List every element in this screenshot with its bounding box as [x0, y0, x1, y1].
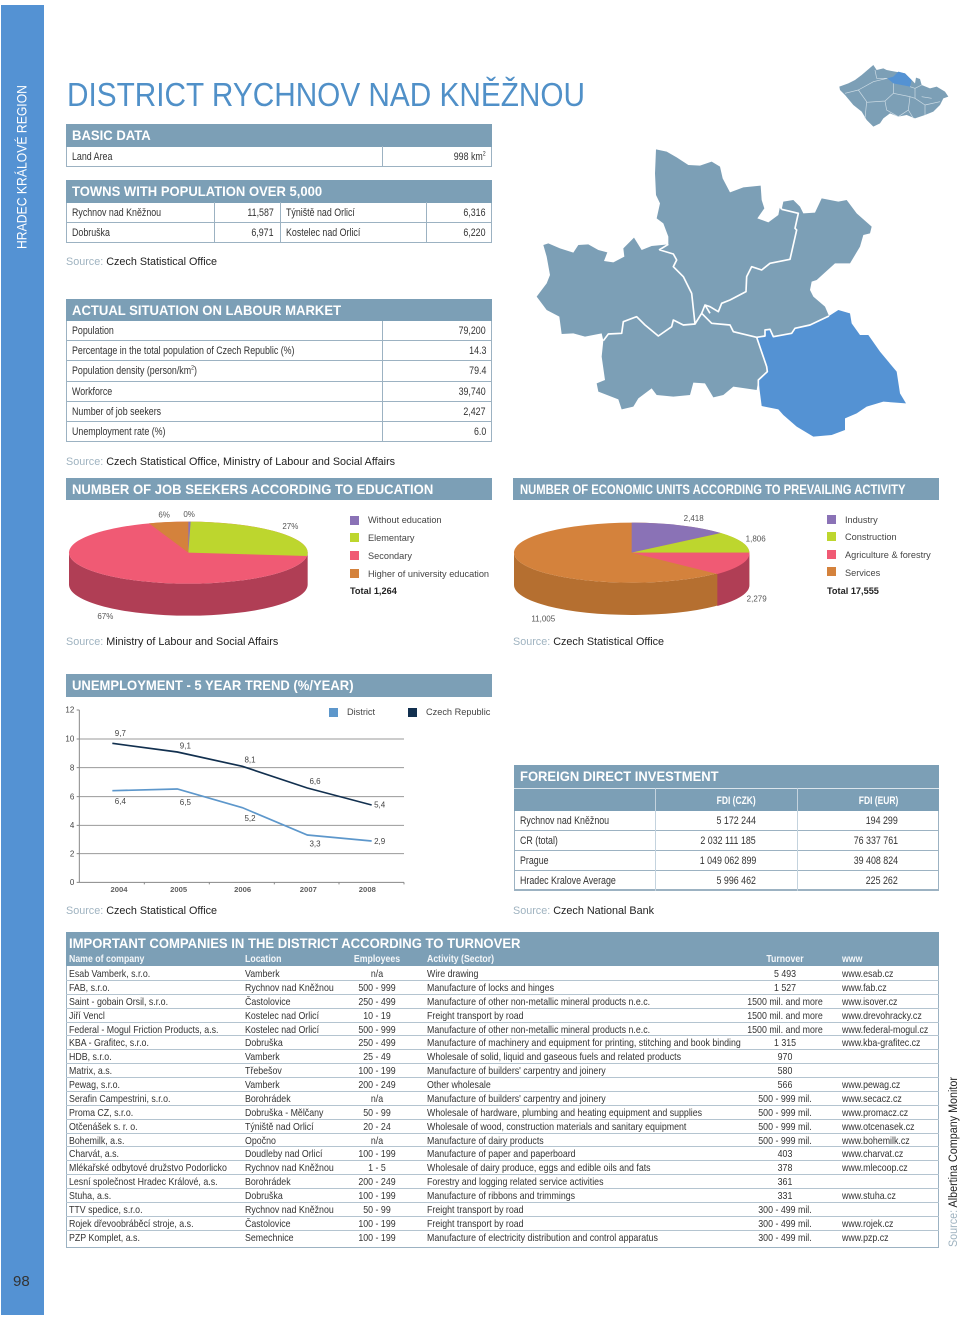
row: population: Population [72, 325, 114, 337]
row: Esab [66, 967, 939, 981]
row: Otčenášek: Wholesale of wood, construction materials and sanitary equipment [427, 1121, 686, 1133]
row: Lesní společnost: 361 [778, 1176, 792, 1188]
row: Esab: Wire drawing [427, 968, 478, 980]
row: Bohemilk [66, 1134, 939, 1147]
row: TTV: 50 - 99 [363, 1204, 391, 1216]
axis labels: 8 [70, 763, 75, 772]
row: percentage [66, 341, 492, 361]
row: Stuha: Dobruška [245, 1190, 283, 1202]
source: companies (rotated): Source: Albertina Company Monitor [948, 1077, 960, 1247]
row: column headers: Location [245, 954, 281, 964]
axis labels [65, 706, 75, 887]
row: unemployment rate: Unemployment rate (%) [72, 426, 166, 438]
row: Mlékařské družstvo [66, 1161, 939, 1175]
row: Proma: 50 - 99 [363, 1107, 391, 1119]
pie chart: economic units: 11,005 [531, 615, 556, 624]
row: Federal-Mogul: 1500 mil. and more [747, 1024, 823, 1036]
row: Serafin: Manufacture of builders' carpentry and joinery [427, 1093, 606, 1105]
row: Rojek: www.rojek.cz [842, 1218, 893, 1230]
row: Pewag: Pewag, s.r.o. [69, 1079, 120, 1091]
row: towns 1: Týniště nad Orlicí [286, 206, 355, 218]
pie chart: job seekers by education: 6% [158, 511, 170, 520]
row: towns 2: 6,220 [464, 227, 486, 239]
page number: 98 [13, 1273, 30, 1290]
legend: economic units: Agriculture & forestry [845, 550, 931, 560]
row: Venci [66, 1009, 939, 1022]
row: Rojek: Častolovice [245, 1218, 291, 1230]
row: Matrix: Třebešov [245, 1065, 282, 1077]
row: Stuha [66, 1189, 939, 1203]
row: Esab: 5 493 [774, 968, 796, 980]
row: Saint-Gobain [66, 995, 939, 1009]
heading: economic units: NUMBER OF ECONOMIC UNITS ACCORDING TO PREVAILING ACTIVITY [520, 482, 905, 496]
map: highlighted district Rychnov nad Kněžnou [757, 310, 906, 437]
legend: economic units [827, 514, 931, 596]
row: workforce: Workforce [72, 386, 112, 398]
row: Saint-Gobain: Manufacture of other non-metallic mineral products n.e.c. [427, 996, 650, 1008]
row: Serafin: Borohrádek [245, 1093, 291, 1105]
heading: unemployment trend [66, 674, 492, 696]
row: Federal-Mogul: www.federal-mogul.cz [842, 1024, 928, 1036]
row: Venci: www.drevohracky.cz [842, 1010, 922, 1022]
row: towns 1 [66, 202, 492, 223]
legend: job seekers by education: Without education [368, 515, 442, 525]
row: towns 2: Dobruška [72, 227, 110, 239]
row: towns 1: 6,316 [464, 206, 486, 218]
row: Bohemilk: Bohemilk, a.s. [69, 1135, 124, 1147]
row: PZP: Manufacture of electricity distribution and control apparatus [427, 1232, 658, 1244]
source: labour market: Source: Czech Statistical Office, Ministry of Labour and Social Affairs [66, 456, 395, 468]
row: column headers: www [842, 954, 862, 964]
row: Hradec Kralove average [514, 871, 939, 890]
row: Venci: Kostelec nad Orlicí [245, 1010, 319, 1022]
row: Hradec Kralove average: 225 262 [866, 875, 898, 887]
row: KBA: 250 - 499 [358, 1037, 396, 1049]
legend: economic units: Services [845, 568, 880, 578]
data labels: 9,1 [180, 741, 191, 750]
row: Matrix: Matrix, a.s. [69, 1065, 112, 1077]
row: Charvát: Charvát, a.s. [69, 1148, 119, 1160]
row: TTV: Freight transport by road [427, 1204, 524, 1216]
row: Serafin: n/a [371, 1093, 383, 1105]
row: Otčenášek: Týniště nad Orlicí [245, 1121, 314, 1133]
row: Saint-Gobain: Častolovice [245, 996, 291, 1008]
row: FAB: Rychnov nad Kněžnou [245, 982, 334, 994]
row: unemployment rate [66, 422, 492, 442]
row: Pewag: www.pewag.cz [842, 1079, 900, 1091]
series: District [112, 789, 372, 841]
row: FDI column headers: FDI (EUR) [858, 794, 898, 806]
row: Lesní společnost [66, 1175, 939, 1189]
legend: unemployment trend [329, 707, 490, 717]
sidebar: region band [1, 5, 44, 1315]
row: Otčenášek: 20 - 24 [363, 1121, 391, 1133]
pie chart: job seekers by education [68, 510, 308, 621]
row: Pewag [66, 1078, 939, 1092]
row: Stuha: www.stuha.cz [842, 1190, 896, 1202]
row: Otčenášek [66, 1120, 939, 1134]
panel: important companies [66, 932, 939, 1248]
data labels: 6,6 [309, 777, 321, 786]
heading: companies: IMPORTANT COMPANIES IN THE DISTRICT ACCORDING TO TURNOVER [69, 936, 520, 951]
legend: job seekers by education: Elementary [368, 533, 414, 543]
row: FDI column headers [514, 788, 939, 810]
row: workforce: 39,740 [459, 386, 486, 398]
row: KBA: 1 315 [774, 1037, 796, 1049]
source: job seekers: Source: Ministry of Labour and Social Affairs [66, 636, 278, 648]
data labels: 3,3 [309, 839, 321, 848]
series: Czech Republic [112, 743, 372, 805]
row: Esab: Esab Vamberk, s.r.o. [69, 968, 150, 980]
row: Bohemilk: n/a [371, 1135, 383, 1147]
row: KBA: Manufacture of machinery and equipment for printing, stitching and book binding [427, 1037, 741, 1049]
pie chart: job seekers by education: 27% [282, 522, 298, 531]
row: Saint-Gobain: Saint - gobain Orsil, s.r.o. [69, 996, 168, 1008]
row: Esab: www.esab.cz [842, 968, 893, 980]
row: Hradec Kralove average: Hradec Kralove Average [520, 875, 616, 887]
row: Bohemilk: www.bohemilk.cz [842, 1135, 910, 1147]
row: Lesní společnost: Forestry and logging related service activities [427, 1176, 603, 1188]
row: HDB: 970 [778, 1051, 792, 1063]
heading: job seekers by education: NUMBER OF JOB SEEKERS ACCORDING TO EDUCATION [72, 482, 433, 496]
row: Venci: Jiří Vencl [69, 1010, 105, 1022]
row: Charvát: 100 - 199 [358, 1148, 396, 1160]
legend: job seekers by education: Secondary [368, 550, 412, 560]
row: HDB [66, 1050, 939, 1064]
row: column headers [69, 954, 862, 964]
legend: job seekers by education: Higher of university education [368, 568, 489, 578]
row: land area [66, 146, 492, 167]
row: density [66, 361, 492, 382]
row: PZP [69, 1232, 889, 1244]
row: KBA: www.kba-grafitec.cz [842, 1037, 920, 1049]
year labels: 2006 [234, 885, 251, 894]
heading: unemployment trend: UNEMPLOYMENT - 5 YEAR TREND (%/YEAR) [72, 678, 354, 693]
heading: labour market: ACTUAL SITUATION ON LABOUR MARKET [72, 302, 341, 318]
data labels: 5,4 [374, 801, 386, 810]
row: Federal-Mogul [66, 1023, 939, 1036]
row: Proma: 500 - 999 mil. [758, 1107, 812, 1119]
row: PZP: 300 - 499 mil. [758, 1232, 812, 1244]
data labels: 5,2 [244, 814, 256, 823]
row: TTV: 300 - 499 mil. [758, 1204, 812, 1216]
row: unemployment rate: 6.0 [474, 426, 486, 438]
row: Stuha: 100 - 199 [358, 1190, 396, 1202]
row: job seekers: 2,427 [464, 406, 486, 418]
row: FAB: 500 - 999 [358, 982, 396, 994]
row: Mlékařské družstvo: 1 - 5 [368, 1162, 386, 1174]
row: workforce [66, 382, 492, 402]
row: TTV: TTV spedice, s.r.o. [69, 1204, 143, 1216]
row: Saint-Gobain: www.isover.cz [842, 996, 897, 1008]
row: Lesní společnost: Borohrádek [245, 1176, 291, 1188]
row: CR total: 76 337 761 [854, 835, 898, 847]
title: DISTRICT RYCHNOV NAD KNĚŽNOU [67, 76, 585, 113]
row: FAB: Manufacture of locks and hinges [427, 982, 554, 994]
data labels: 2,9 [374, 837, 386, 846]
row: Venci: Freight transport by road [427, 1010, 524, 1022]
row: Saint-Gobain: 1500 mil. and more [747, 996, 823, 1008]
row: towns 1: Rychnov nad Kněžnou [72, 206, 161, 218]
row: FDI column headers: FDI (CZK) [717, 794, 756, 806]
year labels: 2005 [170, 885, 188, 894]
row: KBA: KBA - Grafitec, s.r.o. [69, 1037, 149, 1049]
map: east district [710, 198, 872, 337]
row: job seekers: Number of job seekers [72, 406, 161, 418]
sidebar label: region name: HRADEC KRÁLOVÉ REGION [14, 85, 30, 249]
map: west district [537, 238, 695, 341]
row: Lesní společnost: 200 - 249 [358, 1176, 396, 1188]
row: Rychnov: 5 172 244 [717, 814, 756, 826]
row: Bohemilk: 500 - 999 mil. [758, 1135, 812, 1147]
row: PZP: Semechnice [245, 1232, 294, 1244]
row: Serafin: Serafin Campestrini, s.r.o. [69, 1093, 170, 1105]
axis labels: 10 [65, 735, 75, 744]
heading: companies [66, 932, 939, 966]
legend: job seekers by education [350, 515, 489, 596]
row: Serafin: 500 - 999 mil. [758, 1093, 812, 1105]
pie chart: job seekers by education: 0% [183, 510, 195, 519]
data labels [115, 729, 386, 848]
source: unemployment: Source: Czech Statistical Office [66, 905, 217, 917]
row: Charvát: www.charvat.cz [842, 1148, 903, 1160]
row: job seekers [66, 402, 492, 422]
row: Hradec Kralove average: 5 996 462 [717, 875, 756, 887]
row: FAB: FAB, s.r.o. [69, 982, 110, 994]
icon: Czech Republic locator map [839, 65, 948, 127]
row: Charvát: Manufacture of paper and paperboard [427, 1148, 576, 1160]
legend: unemployment trend: Czech Republic [426, 707, 490, 717]
source: economic units: Source: Czech Statistical Office [513, 636, 664, 648]
year labels: 2008 [359, 885, 377, 894]
row: Rojek: Rojek dřevoobráběcí stroje, a.s. [69, 1218, 194, 1230]
row: Federal-Mogul: Federal - Mogul Friction Products, a.s. [69, 1024, 219, 1036]
row: Pewag: 200 - 249 [358, 1079, 396, 1091]
panel: basic data [66, 124, 492, 167]
row: HDB: Vamberk [245, 1051, 280, 1063]
legend: economic units: Construction [845, 532, 897, 542]
row: column headers: Name of company [69, 954, 144, 964]
row: Otčenášek: Otčenášek s. r. o. [69, 1121, 138, 1133]
row: Pewag: Other wholesale [427, 1079, 491, 1091]
row: Otčenášek: 500 - 999 mil. [758, 1121, 812, 1133]
row: HDB: 25 - 49 [363, 1051, 391, 1063]
row: Pewag: Vamberk [245, 1079, 280, 1091]
axis labels: 0 [70, 878, 75, 887]
data labels: 6,5 [180, 798, 191, 807]
heading: labour market [66, 298, 492, 321]
row: FAB: 1 527 [774, 982, 796, 994]
row: Pewag: 566 [778, 1079, 792, 1091]
row: Venci: 10 - 19 [363, 1010, 391, 1022]
source: FDI: Source: Czech National Bank [513, 905, 654, 917]
row: density: 79.4 [469, 365, 486, 377]
row: Prague: Prague [520, 855, 549, 867]
row: CR total [514, 831, 939, 851]
heading: basic data: BASIC DATA [72, 128, 151, 143]
row: Bohemilk: Manufacture of dairy products [427, 1135, 544, 1147]
row: Rychnov: 194 299 [866, 814, 898, 826]
row: Mlékařské družstvo: 378 [778, 1162, 792, 1174]
data labels: 8,1 [244, 756, 256, 765]
row: column headers: Turnover [766, 954, 804, 964]
heading: job seekers by education [66, 478, 492, 500]
legend: economic units: Industry [845, 514, 878, 524]
heading: economic units [513, 478, 939, 500]
row: Proma: Dobruška - Mělčany [245, 1107, 323, 1119]
row: Federal-Mogul: Manufacture of other non-metallic mineral products n.e.c. [427, 1024, 650, 1036]
axis labels: 4 [70, 821, 75, 830]
pie chart: job seekers by education: 67% [97, 612, 113, 621]
row: Rychnov [514, 810, 939, 831]
data labels: 6,4 [115, 797, 126, 806]
year labels [110, 885, 377, 894]
row: PZP: www.pzp.cz [842, 1232, 889, 1244]
heading: towns [66, 180, 492, 202]
row: Matrix: Manufacture of builders' carpentry and joinery [427, 1065, 606, 1077]
row: Proma: Proma CZ, s.r.o. [69, 1107, 133, 1119]
row: Mlékařské družstvo: Rychnov nad Kněžnou [245, 1162, 334, 1174]
row: FAB: www.fab.cz [842, 982, 887, 994]
row: Matrix: 580 [778, 1065, 792, 1077]
row: KBA [66, 1036, 939, 1050]
panel: towns with population over 5,000 [66, 180, 492, 243]
row: towns 1: 11,587 [248, 206, 274, 218]
row: Rojek [66, 1217, 939, 1231]
row: Rychnov: Rychnov nad Kněžnou [520, 814, 609, 826]
row: Mlékařské družstvo: Mlékařské odbytové družstvo Podorlicko [69, 1162, 227, 1174]
row: Matrix: 100 - 199 [358, 1065, 396, 1077]
row: Prague: 39 408 824 [854, 855, 898, 867]
source: towns: Source: Czech Statistical Office [66, 256, 217, 268]
heading: FDI [514, 765, 939, 788]
panel: labour market [66, 298, 492, 442]
heading: towns: TOWNS WITH POPULATION OVER 5,000 [72, 184, 322, 199]
row: Matrix [66, 1064, 939, 1078]
row: column headers: Employees [354, 954, 400, 964]
row: towns 2: Kostelec nad Orlicí [286, 227, 360, 239]
row: Venci: 1500 mil. and more [747, 1010, 823, 1022]
row: percentage: 14.3 [469, 345, 486, 357]
row: Serafin [66, 1092, 939, 1106]
row: Esab: Vamberk [245, 968, 280, 980]
row: percentage: Percentage in the total population of Czech Republic (%) [72, 345, 294, 357]
line chart: unemployment trend [65, 706, 404, 894]
legend: job seekers by education: Total 1,264 [350, 586, 397, 596]
row: towns 2: 6,971 [252, 227, 274, 239]
year labels: 2004 [110, 885, 128, 894]
row: population: 79,200 [459, 325, 486, 337]
pie chart: economic units: 2,418 [684, 514, 704, 523]
row: FAB [66, 981, 939, 995]
row: Otčenášek: www.otcenasek.cz [842, 1121, 915, 1133]
legend: economic units: Total 17,555 [827, 586, 879, 596]
heading: FDI: FOREIGN DIRECT INVESTMENT [520, 769, 719, 784]
row: PZP: PZP Komplet, a.s. [69, 1232, 140, 1244]
map: Hradec Králové region with districts [536, 149, 906, 437]
row: Stuha: Stuha, a.s. [69, 1190, 111, 1202]
row: HDB: HDB, s.r.o. [69, 1051, 112, 1063]
axis labels: 6 [70, 792, 75, 801]
row: TTV [66, 1203, 939, 1217]
row: HDB: Wholesale of solid, liquid and gaseous fuels and related products [427, 1051, 681, 1063]
row: PZP: 100 - 199 [358, 1232, 396, 1244]
row: Charvát: Doudleby nad Orlicí [245, 1148, 322, 1160]
row: population [66, 321, 492, 341]
row: KBA: Dobruška [245, 1037, 283, 1049]
row: TTV: Rychnov nad Kněžnou [245, 1204, 334, 1216]
row: land area: 998 km2 [454, 150, 486, 162]
row: Charvát: 403 [778, 1148, 792, 1160]
row: Federal-Mogul: 500 - 999 [358, 1024, 396, 1036]
row: Bohemilk: Opočno [245, 1135, 276, 1147]
row: Rojek: 300 - 499 mil. [758, 1218, 812, 1230]
row: Charvát [66, 1147, 939, 1161]
heading: basic data [66, 124, 492, 146]
row: Prague: 1 049 062 899 [699, 855, 756, 867]
row: Mlékařské družstvo: www.mlecoop.cz [842, 1162, 908, 1174]
legend: unemployment trend: District [347, 707, 375, 717]
row: Esab: n/a [371, 968, 383, 980]
pie chart: economic units: 1,806 [746, 535, 766, 544]
axis labels: 12 [65, 706, 75, 715]
row: Lesní společnost: Lesní společnost Hradec Králové, a.s. [69, 1176, 218, 1188]
row: CR total: 2 032 111 185 [701, 835, 756, 847]
row: Prague [514, 851, 939, 871]
row: Stuha: Manufacture of ribbons and trimmings [427, 1190, 575, 1202]
row: Federal-Mogul: Kostelec nad Orlicí [245, 1024, 319, 1036]
row: Rojek: 100 - 199 [358, 1218, 396, 1230]
row: density: Population density (person/km2) [72, 365, 197, 377]
row: Proma: Wholesale of hardware, plumbing and heating equipment and supplies [427, 1107, 702, 1119]
map: south-west district [597, 313, 767, 409]
row: Mlékařské družstvo: Wholesale of dairy produce, eggs and edible oils and fats [427, 1162, 651, 1174]
axis labels: 2 [70, 849, 75, 858]
row: towns 2 [66, 223, 492, 243]
map: district north [655, 149, 798, 317]
row: Proma: www.promacz.cz [842, 1107, 908, 1119]
row: Rojek: Freight transport by road [427, 1218, 524, 1230]
row: Stuha: 331 [778, 1190, 792, 1202]
row: column headers: Activity (Sector) [427, 954, 494, 964]
pie chart: economic units: 2,279 [747, 594, 767, 603]
year labels: 2007 [300, 885, 317, 894]
row: Serafin: www.secacz.cz [842, 1093, 902, 1105]
row: Saint-Gobain: 250 - 499 [358, 996, 396, 1008]
pie chart: economic units [514, 514, 767, 624]
row: Proma [66, 1106, 939, 1120]
panel: foreign direct investment [514, 765, 939, 890]
row: CR total: CR (total) [520, 835, 558, 847]
data labels: 9,7 [115, 729, 126, 738]
row: land area: Land Area [72, 150, 112, 162]
